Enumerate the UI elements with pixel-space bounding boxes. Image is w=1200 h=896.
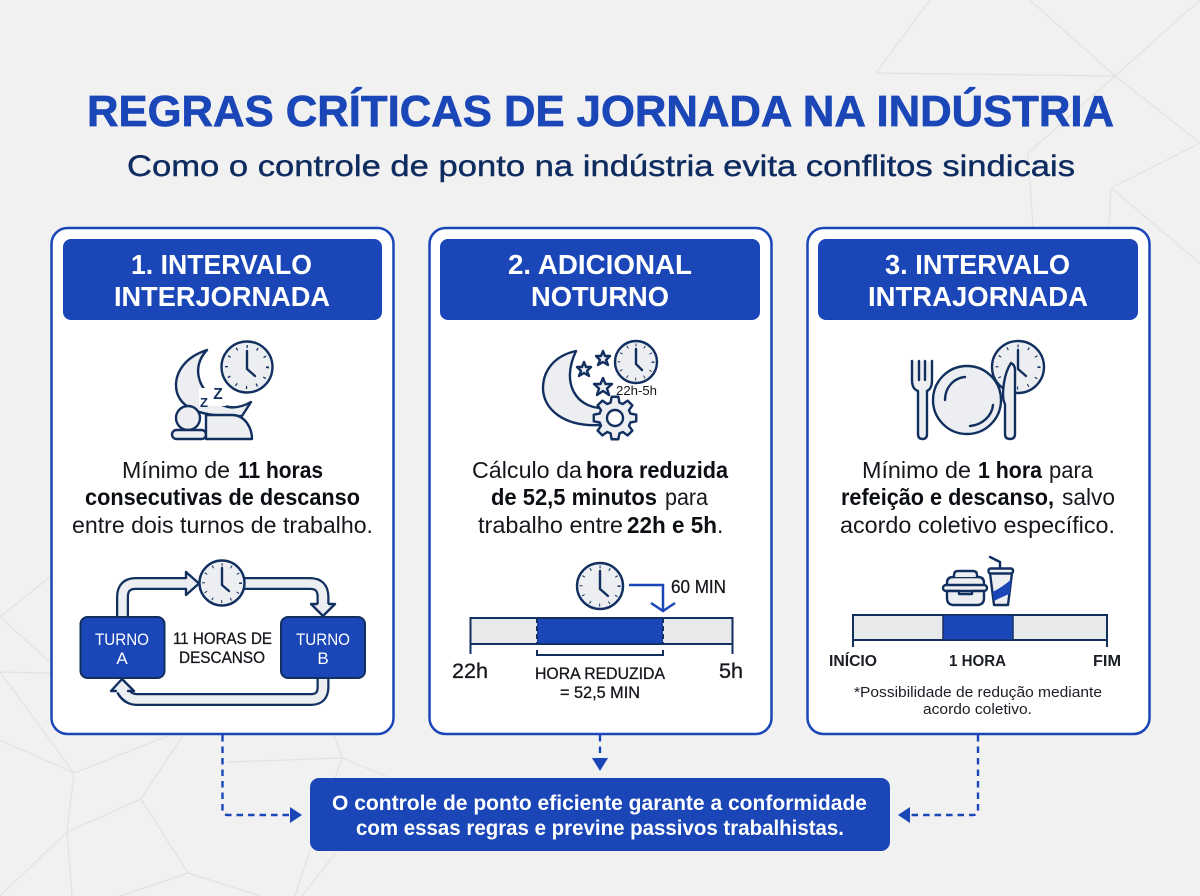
heading: 1. intervalo interjornada: INTERJORNADA: [114, 281, 330, 312]
text: refeição e descanso: 1 hora: [978, 457, 1042, 483]
icon: lua, estrelas, relógio e engrenagem: [543, 341, 657, 439]
diagram: ciclo de turnos: [80, 560, 365, 700]
text: refeição e descanso: [840, 457, 1115, 538]
heading: 3. intervalo intrajornada: INTRAJORNADA: [868, 281, 1088, 312]
title: REGRAS CRÍTICAS DE JORNADA NA INDÚSTRIA: [87, 86, 1114, 136]
timeline: 22h a 5h: HORA REDUZIDA: [535, 665, 665, 683]
callout: conclusão: com essas regras e previne passivos trabalhistas.: [356, 817, 844, 840]
box: turno A: A: [116, 649, 128, 668]
text: descanso mínimo: Mínimo de: [122, 457, 230, 483]
text: hora reduzida: de 52,5 minutos: [491, 484, 657, 510]
note: redução por acordo: acordo coletivo.: [923, 702, 1032, 718]
panel: intervalo interjornada: [52, 228, 394, 734]
arrow: 60 min: 60 MIN: [671, 577, 726, 597]
timeline: 1 hora: FIM: [1093, 653, 1121, 670]
text: refeição e descanso: Mínimo de: [862, 457, 971, 483]
text: refeição e descanso: acordo coletivo específico.: [840, 512, 1115, 538]
icon: lua, estrelas, relógio e engrenagem: 22h-5h: [616, 384, 657, 398]
text: descanso mínimo: entre dois turnos de trabalho.: [72, 512, 373, 538]
text: descanso mínimo: consecutivas de descanso: [85, 484, 360, 510]
note: redução por acordo: [854, 685, 1102, 718]
icon: copo com canudo: [988, 557, 1013, 605]
text: descanso mínimo: [72, 457, 373, 538]
timeline: 1 hora: [829, 615, 1121, 670]
text: hora reduzida: .: [717, 512, 723, 538]
label: 11 horas de descanso: 11 HORAS DE: [173, 630, 272, 648]
heading: 3. intervalo intrajornada: [818, 239, 1138, 320]
text: refeição e descanso: salvo: [1062, 484, 1115, 510]
icon: relógio 60 min: [577, 563, 623, 609]
arrow: turno B para turno A: [111, 677, 323, 700]
box: turno B: B: [317, 649, 329, 668]
callout: conclusão: O controle de ponto eficiente garante a conformidade: [332, 792, 867, 815]
heading: 1. intervalo interjornada: [63, 239, 382, 320]
heading: 2. adicional noturno: 2. ADICIONAL: [508, 249, 692, 280]
icon: prato, talheres e relógio: [912, 341, 1044, 439]
timeline: 22h a 5h: 22h: [452, 660, 488, 683]
box: turno B: [281, 617, 365, 678]
icon: sleeping under moon with clock: Z: [213, 386, 223, 403]
label: 11 horas de descanso: [173, 630, 272, 667]
arrow: painel 1 para conclusão: [222, 735, 302, 823]
text: descanso mínimo: 11 horas: [238, 457, 323, 483]
text: hora reduzida: 22h e 5h: [627, 512, 717, 538]
heading: 3. intervalo intrajornada: 3. INTERVALO: [885, 249, 1070, 280]
box: turno A: TURNO: [95, 630, 149, 649]
panel: intervalo intrajornada: [808, 228, 1150, 734]
timeline: 22h a 5h: = 52,5 MIN: [560, 684, 640, 702]
icon: sleeping under moon with clock: Z: [200, 395, 208, 410]
arrow: turno A para relógio: [122, 572, 199, 618]
icon: sleeping under moon with clock: [172, 342, 272, 439]
icon: marmita: [943, 571, 987, 605]
label: 11 horas de descanso: DESCANSO: [179, 649, 265, 667]
icon: relógio: [200, 560, 244, 606]
text: refeição e descanso: para: [1049, 457, 1093, 483]
heading: 1. intervalo interjornada: 1. INTERVALO: [131, 249, 312, 280]
timeline: 22h a 5h: 5h: [719, 660, 743, 683]
heading: 2. adicional noturno: NOTURNO: [531, 281, 669, 312]
timeline: 1 hora: 1 HORA: [949, 653, 1006, 670]
text: hora reduzida: hora reduzida: [586, 457, 728, 483]
timeline: 1 hora: INÍCIO: [829, 651, 877, 670]
arrow: painel 2 para conclusão: [592, 735, 608, 771]
arrow: 60 min: [629, 577, 726, 611]
text: hora reduzida: trabalho entre: [478, 512, 623, 538]
text: hora reduzida: para: [665, 484, 708, 510]
text: hora reduzida: [472, 457, 728, 538]
callout: conclusão: [310, 778, 890, 851]
arrow: relógio para turno B: [240, 584, 335, 616]
box: turno B: TURNO: [296, 630, 350, 649]
heading: 2. adicional noturno: [440, 239, 760, 320]
note: redução por acordo: *Possibilidade de redução mediante: [854, 685, 1102, 701]
box: turno A: [80, 617, 164, 678]
timeline: 22h a 5h: [452, 618, 743, 702]
text: hora reduzida: Cálculo da: [472, 457, 582, 483]
text: refeição e descanso: refeição e descanso,: [841, 484, 1054, 510]
arrow: painel 3 para conclusão: [898, 735, 978, 823]
subtitle: Como o controle de ponto na indústria evita conflitos sindicais: [127, 150, 1075, 183]
panel: adicional noturno: [430, 228, 772, 734]
